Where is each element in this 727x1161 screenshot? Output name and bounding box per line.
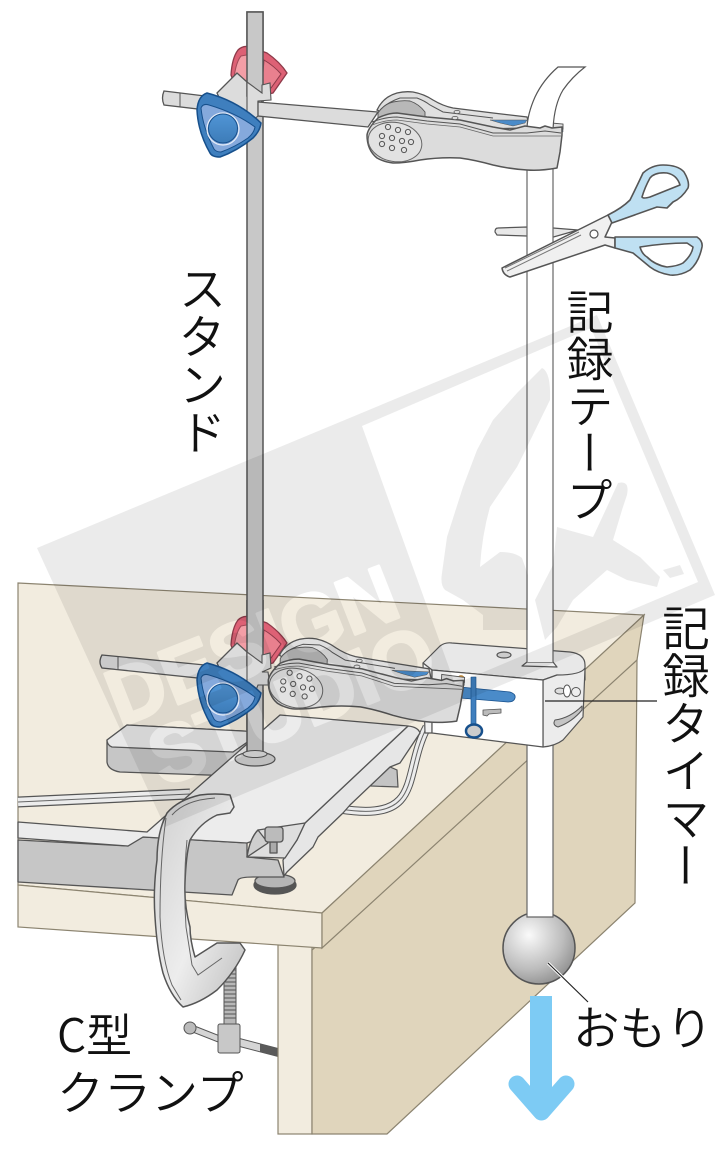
arrow xyxy=(517,996,566,1112)
label: recording timer: 記録タイマー xyxy=(654,604,709,889)
table front edge xyxy=(18,885,322,948)
upper clamp head xyxy=(197,12,378,157)
watermark xyxy=(37,315,715,827)
thumb screw xyxy=(265,827,283,853)
arm side xyxy=(283,726,420,876)
table leg xyxy=(278,660,637,1134)
bolt recess xyxy=(247,823,305,858)
label: C clamp: C型 xyxy=(57,1000,132,1066)
watermark frame xyxy=(37,315,715,827)
lower rod xyxy=(100,655,205,678)
C clamp screw and handle xyxy=(184,960,280,1057)
leader line: timer xyxy=(545,700,657,702)
front side xyxy=(18,837,284,895)
terminal clip xyxy=(554,706,582,727)
scissors xyxy=(502,165,702,277)
wire: timer cable left xyxy=(18,794,190,802)
lower handle xyxy=(615,237,702,275)
label: C clamp: クランプ xyxy=(57,1067,244,1120)
label: stand: スタンド xyxy=(170,264,224,456)
lower clip xyxy=(265,636,466,724)
C clamp body xyxy=(154,794,245,1007)
timer side xyxy=(543,668,585,747)
lower clamp head xyxy=(197,600,287,730)
tape upper curl xyxy=(527,67,585,130)
pivot xyxy=(590,230,598,238)
table side edge xyxy=(322,615,644,948)
table top xyxy=(18,583,644,913)
tape slot xyxy=(522,662,557,667)
orange dot xyxy=(458,676,464,682)
upper clip back jaw xyxy=(377,92,563,132)
timer front xyxy=(432,670,543,747)
rear foot xyxy=(107,725,262,776)
weight xyxy=(503,912,575,984)
upper rod xyxy=(162,91,205,109)
terminal screw xyxy=(555,685,580,697)
rod base ring xyxy=(235,750,275,766)
blue vibrating bar xyxy=(460,677,515,738)
recording timer xyxy=(423,600,585,747)
leader line: weight xyxy=(548,963,588,1002)
label: C clamp xyxy=(57,1000,244,1120)
front blade xyxy=(502,215,615,277)
rubber foot xyxy=(254,874,296,894)
small metal part xyxy=(483,709,501,716)
underside notch of base xyxy=(370,767,398,787)
label: recording tape: 記録テープ xyxy=(560,288,613,523)
label: weight: おもり xyxy=(573,1003,712,1055)
upper clip front jaw xyxy=(365,110,562,170)
timer left frame xyxy=(423,663,432,733)
stand base xyxy=(18,715,420,895)
top plate xyxy=(18,715,408,846)
stand rod xyxy=(235,12,275,766)
upper handle xyxy=(608,165,688,223)
wire: cable under base xyxy=(340,727,427,811)
recording tape xyxy=(527,168,553,917)
timer top face xyxy=(423,643,585,680)
watermark brush mark xyxy=(441,368,550,630)
scissors back blade xyxy=(495,227,578,238)
table xyxy=(18,583,644,1134)
